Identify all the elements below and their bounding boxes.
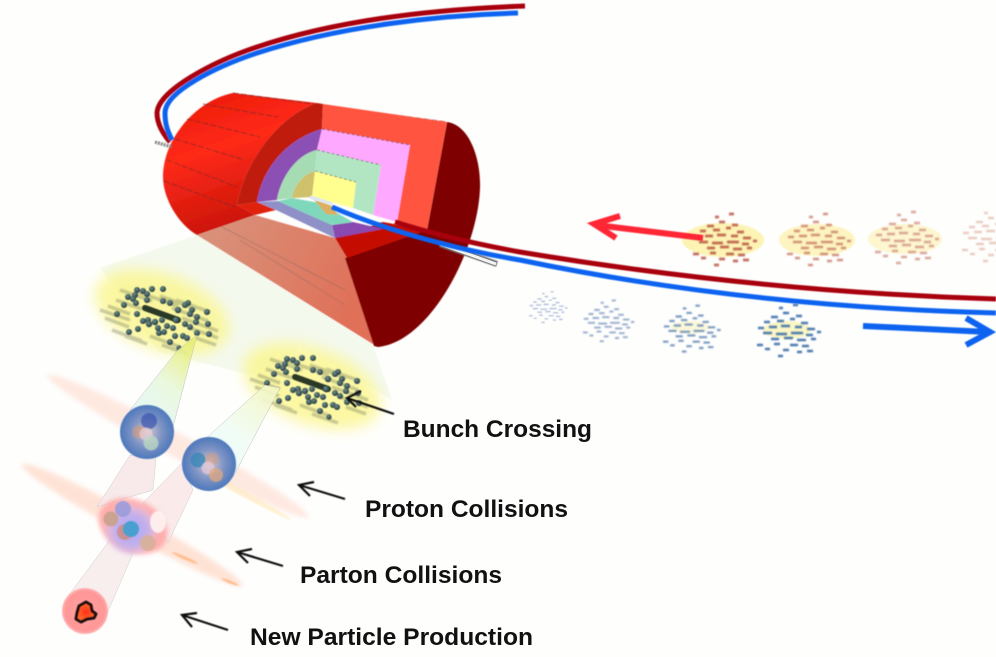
bunch one [83,252,241,372]
cone bunch one to proton [130,335,197,427]
salmon seams [222,227,345,305]
red bunch 3 [875,212,939,263]
blue bunch 4 [529,292,567,322]
blue bunch 2 [663,306,721,352]
purple arc [257,129,322,202]
grey pipe highlight [440,244,496,264]
cone bunch two to proton [182,385,280,477]
blue direction arrow [863,318,990,345]
parton collision blob [89,487,177,565]
label: proton collisions: Proton Collisions [365,496,568,523]
yellow inner panel [312,171,356,208]
inner dashes [315,129,410,182]
blue bunch 1 [757,305,821,356]
beam line red [395,222,996,299]
label: bunch crossing: Bunch Crossing [403,416,592,443]
red bunches incoming [682,210,996,265]
floor purple [332,222,383,238]
salmon cut-away lower barrel [197,215,376,346]
arrow: bunch crossing [347,391,394,414]
detector cone to bunches [100,235,392,400]
grey beam pipe right [440,244,497,264]
floor teal [278,198,353,225]
proton sphere two [182,437,236,491]
grey beam pipe centre [310,197,332,204]
smeared proton streak upper [42,365,314,527]
red bunch 4 faded [962,210,996,261]
pale green panel [315,150,381,215]
floor orange centre [312,197,338,215]
grey beam pipe left [155,142,172,147]
red bunch 1 [693,214,757,265]
detector cylinder [163,93,480,347]
smeared proton streak lower [16,455,248,595]
red bunch 2 [787,214,851,265]
label: parton collisions: Parton Collisions [300,562,502,589]
cone proton two to collision [143,463,193,543]
cone collision to new particle [69,533,140,616]
cut face dark red arc [237,103,323,205]
arrow: new particle production [182,613,228,630]
outer red barrel [163,93,317,235]
red direction arrow [594,216,703,238]
arrow: proton collisions [299,482,345,499]
label: new particle production: New Particle Production [250,624,533,651]
floor pale blue-violet [257,201,335,238]
floor red wedge [237,202,276,215]
bunch halo 3 [868,224,942,254]
dark red end cap [345,122,480,347]
cone proton one to collision [97,455,156,507]
proton sphere one [120,405,174,459]
beam lines top [157,6,525,142]
beam line blue [332,207,996,313]
barrel seams [164,93,447,207]
arrow: parton collisions [237,549,283,566]
floor red [335,222,427,258]
bunch halo 2 [779,224,855,256]
olive inner arc [292,171,315,198]
bunch two [231,326,393,446]
green arc [277,150,317,200]
blue bunches [529,292,821,356]
pink panel [317,129,410,222]
new particle [62,588,108,634]
blue bunch 3 [583,300,634,341]
bunch halo 1 [682,223,764,257]
cut face orange-red [322,104,447,230]
